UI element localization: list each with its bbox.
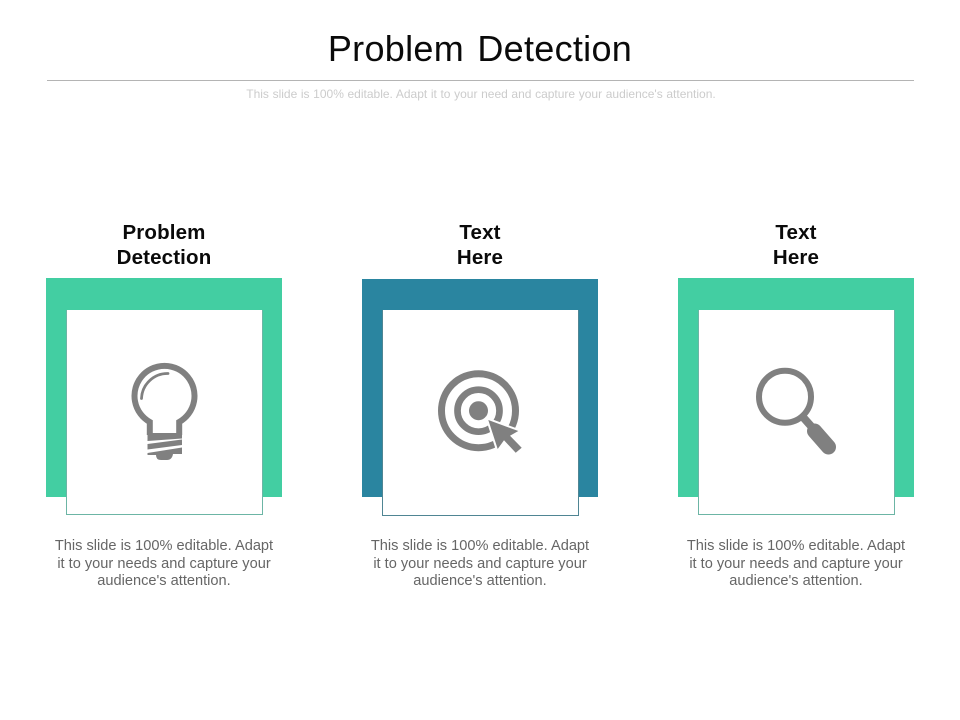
- heading: text here right: Text: [775, 221, 817, 244]
- body text: right: audience's attention.: [729, 573, 863, 589]
- body text: center: [371, 538, 589, 589]
- icon: magnifying glass: [756, 368, 836, 454]
- panel: right card: [698, 310, 895, 515]
- body text: center: it to your needs and capture your: [373, 556, 587, 572]
- body text: left: [55, 538, 273, 589]
- panel: center frame: [362, 279, 598, 497]
- heading: problem detection: Detection: [117, 246, 211, 269]
- body text: center: This slide is 100% editable. Adapt: [371, 538, 589, 554]
- body text: left: it to your needs and capture your: [57, 556, 271, 572]
- icon: light bulb: [132, 362, 198, 460]
- panel: left card: [66, 310, 263, 515]
- body text: right: This slide is 100% editable. Adapt: [687, 538, 905, 554]
- body text: right: [687, 538, 905, 589]
- body text: right: it to your needs and capture your: [689, 556, 903, 572]
- subtitle: This slide is 100% editable. Adapt it to your need and capture your audience's attention.: [246, 87, 716, 101]
- heading: problem detection: [117, 221, 211, 269]
- heading: problem detection: Problem: [122, 221, 206, 244]
- heading: text here center: Here: [457, 246, 503, 269]
- body text: left: This slide is 100% editable. Adapt: [55, 538, 273, 554]
- heading: text here right: [773, 221, 819, 269]
- heading: text here center: Text: [459, 221, 501, 244]
- heading: text here right: Here: [773, 246, 819, 269]
- body text: left: audience's attention.: [97, 573, 231, 589]
- divider line: [47, 80, 914, 81]
- icon: target with cursor: [438, 370, 522, 453]
- panel: right frame: [678, 278, 914, 497]
- heading: text here center: [457, 221, 503, 269]
- panel: center card: [382, 310, 579, 516]
- title: Problem Detection: [328, 28, 632, 69]
- panel: left frame: [46, 278, 282, 497]
- body text: center: audience's attention.: [413, 573, 547, 589]
